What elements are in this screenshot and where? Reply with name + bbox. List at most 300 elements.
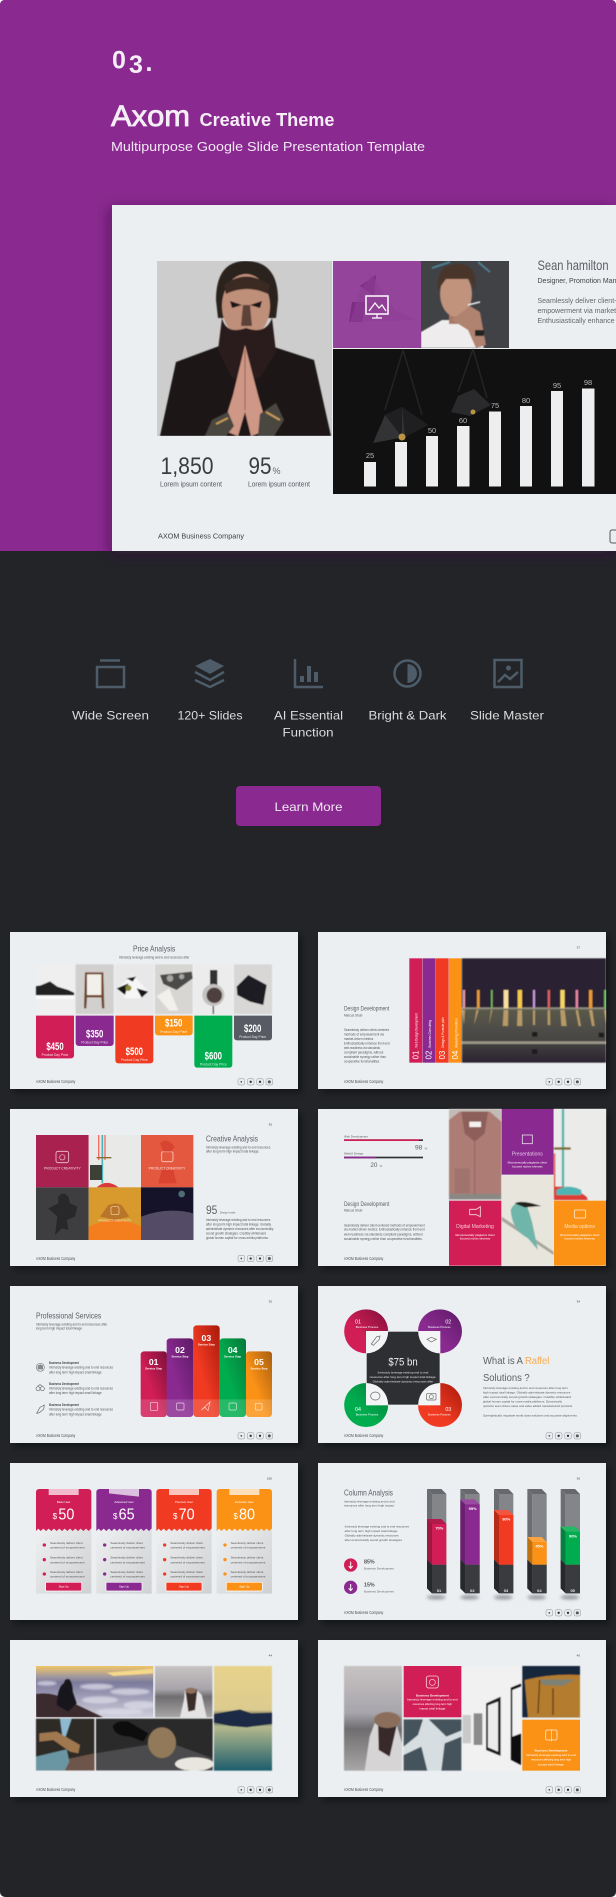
paragraph: global human capital for cross-media platforms. Dynamically bbox=[483, 1399, 562, 1403]
subtext bbox=[206, 1145, 271, 1154]
price labels: Product Day Price bbox=[239, 1035, 266, 1039]
service item 2: after long term high impact small linkage bbox=[49, 1391, 102, 1395]
column 03: 80% bbox=[502, 1517, 511, 1522]
paragraph: web-readiness via standards compliant paradigms, without bbox=[344, 1232, 423, 1236]
card: exclusive: Sign Up bbox=[239, 1585, 250, 1589]
creative tile grid: PRODUCT CREATIVITY bbox=[99, 1219, 131, 1223]
card: basic: Seamlessly deliver client bbox=[50, 1556, 83, 1560]
tile: digital marketing: Digital Marketing bbox=[456, 1224, 494, 1230]
card: advanced: centered of empowerment bbox=[110, 1560, 145, 1564]
card: basic: centered of empowerment bbox=[50, 1560, 85, 1564]
card: advanced: Sign Up bbox=[119, 1585, 129, 1589]
bar chart panel bbox=[333, 349, 616, 494]
service item 3: Intrinsicly leverage existing and to end resources bbox=[49, 1408, 113, 1412]
photo: calm lake bbox=[214, 1666, 272, 1771]
stat: 15% bbox=[344, 1581, 394, 1594]
price labels: $350 bbox=[86, 1029, 103, 1041]
stat: . Design Inside bbox=[218, 1211, 236, 1215]
slide: creative analysis bbox=[10, 1109, 298, 1266]
price labels: Product Day Price bbox=[160, 1030, 187, 1034]
service item 3: Business Development bbox=[49, 1403, 80, 1407]
bar chart panel: 98 bbox=[584, 378, 592, 387]
footer bbox=[36, 1255, 273, 1262]
paragraph: market-driven metrics. bbox=[344, 1037, 374, 1041]
footer bbox=[36, 1079, 273, 1085]
subtext: long term high impact total linkage bbox=[36, 1327, 82, 1331]
photo: leather bag bbox=[522, 1666, 580, 1717]
paragraph: via market-driven metrics. Enthusiastically enhance front-end bbox=[344, 1228, 425, 1232]
stat: 85%: 85% bbox=[364, 1559, 375, 1565]
paragraph: Globally administrate dynamic resources bbox=[345, 1533, 399, 1537]
product photos bbox=[36, 964, 272, 1014]
bar chart panel: 75 bbox=[491, 401, 499, 410]
progress: web ui design: 20 bbox=[370, 1162, 378, 1169]
numbered colour strips: . Marketing Promotion bbox=[454, 1018, 458, 1049]
process diagram: Globally administrate dynamic resources after bbox=[373, 1379, 433, 1383]
tile: business development orange: Intrinsicly leverage existing and to end bbox=[526, 1753, 576, 1757]
process diagram: 01 bbox=[355, 1319, 361, 1325]
card: premium: Seamlessly deliver client bbox=[170, 1556, 203, 1560]
label: slide master: Slide Master bbox=[470, 708, 544, 722]
tile: presentations bbox=[502, 1109, 554, 1175]
page number: 44 bbox=[269, 1653, 272, 1657]
paragraph: sustainable synergy rather than cooperative functionalities. bbox=[344, 1237, 423, 1241]
photo: gallery wall bbox=[463, 1666, 521, 1771]
price labels: $450 bbox=[46, 1041, 64, 1053]
card: advanced: 65 bbox=[119, 1506, 135, 1523]
stat bbox=[206, 1203, 236, 1217]
page number: 35 bbox=[269, 1299, 272, 1303]
numbered colour strips: 03 bbox=[438, 1050, 447, 1059]
tile: media options: Media options bbox=[564, 1224, 595, 1230]
column 03 bbox=[494, 1489, 513, 1600]
price labels: Product Day Price bbox=[121, 1058, 148, 1062]
card: exclusive bbox=[217, 1489, 272, 1594]
card: basic: Seamlessly deliver client bbox=[50, 1570, 83, 1574]
price labels: $500 bbox=[126, 1046, 143, 1058]
paragraph: cooperative functionalities. bbox=[344, 1060, 380, 1064]
column 01: 01 bbox=[437, 1588, 442, 1593]
footer: AXOM Business Company bbox=[36, 1079, 76, 1084]
bar chart panel: 50 bbox=[428, 426, 436, 435]
slide: progress and tiles bbox=[318, 1109, 606, 1266]
price labels bbox=[42, 1018, 266, 1066]
heading: Design Development bbox=[344, 1201, 389, 1208]
paragraph: after long term high impact total linkage. bbox=[345, 1529, 398, 1533]
tile: business development crimson: Business Development bbox=[416, 1693, 449, 1697]
stepped columns chart: 04 bbox=[228, 1345, 238, 1355]
card: advanced: Seamlessly deliver client bbox=[110, 1541, 143, 1545]
progress: web development: 98 bbox=[415, 1144, 423, 1151]
footer: AXOM Business Company bbox=[344, 1256, 384, 1261]
tile: digital marketing: focused niches whereas bbox=[460, 1237, 491, 1241]
paragraph: sound growth strategies. Credibly whiteboard bbox=[206, 1231, 266, 1235]
slide: column analysis bbox=[318, 1463, 606, 1620]
label: slides: 120+ Slides bbox=[178, 708, 242, 722]
photo: photographer bbox=[36, 1719, 94, 1770]
price labels: $150 bbox=[165, 1018, 182, 1030]
card: exclusive: $ bbox=[233, 1512, 238, 1521]
creative tile grid: PRODUCT CREATIVITY bbox=[44, 1166, 81, 1170]
column 02: 02 bbox=[470, 1588, 475, 1593]
section number: 3 bbox=[129, 51, 143, 79]
right slides rows 1-2 bbox=[318, 932, 606, 1266]
stat: 15%: 15% bbox=[364, 1583, 375, 1589]
tile: business development orange bbox=[522, 1720, 580, 1771]
card: premium: $ bbox=[173, 1512, 178, 1521]
tile: media options bbox=[554, 1201, 606, 1266]
subtext: Intrinsicly leverage existing and to end bbox=[344, 1499, 395, 1503]
card: advanced: Seamlessly deliver client bbox=[110, 1556, 143, 1560]
label: essential function: Function bbox=[282, 726, 334, 740]
creative tile grid bbox=[36, 1135, 193, 1240]
photo: woman by the sea bbox=[344, 1666, 402, 1771]
stepped columns chart: Service Step bbox=[224, 1354, 241, 1358]
stat: 85% bbox=[344, 1558, 394, 1572]
process diagram: Business Process bbox=[428, 1413, 451, 1417]
progress: web ui design: % bbox=[380, 1164, 383, 1168]
card: basic: 50 bbox=[58, 1506, 74, 1523]
numbered colour strips: 04 bbox=[451, 1050, 460, 1059]
process diagram: Business Process bbox=[356, 1325, 379, 1329]
heading: Raffel bbox=[525, 1356, 549, 1367]
photo: bearded man bbox=[157, 261, 332, 436]
page number: 40 bbox=[577, 1653, 580, 1657]
footer: AXOM Business Company bbox=[344, 1433, 384, 1438]
hero slide mockup bbox=[112, 205, 616, 551]
photo: wax seal bbox=[96, 1719, 214, 1771]
footer bbox=[344, 1433, 581, 1439]
stat: 1,850: Lorem ipsum content bbox=[160, 482, 222, 488]
social icon bbox=[610, 530, 616, 543]
card: premium: Sign Up bbox=[179, 1585, 189, 1589]
card: premium: centered of empowerment bbox=[170, 1575, 205, 1579]
label: wide screen: Wide Screen bbox=[72, 708, 149, 722]
card: exclusive: centered of empowerment bbox=[231, 1546, 266, 1550]
author: Marcus Shub bbox=[344, 1013, 363, 1017]
tile: business development crimson bbox=[404, 1666, 461, 1717]
slide: what is a raffel bbox=[318, 1286, 606, 1443]
service item 2: Business Development bbox=[49, 1382, 80, 1386]
stepped columns chart: Service Step bbox=[198, 1343, 215, 1347]
creative tile grid: PRODUCT CREATIVITY bbox=[149, 1166, 186, 1170]
footer: AXOM Business Company bbox=[344, 1079, 384, 1084]
process diagram: Business Process bbox=[428, 1325, 451, 1329]
subtext bbox=[36, 1322, 107, 1331]
title bbox=[111, 100, 334, 133]
footer: AXOM Business Company bbox=[344, 1787, 384, 1792]
heading: Professional Services bbox=[36, 1310, 102, 1320]
section number: . bbox=[146, 49, 152, 77]
subheading: Intrinsicly leverage existing and to end resources after bbox=[119, 955, 190, 959]
card: basic: Seamlessly deliver client bbox=[50, 1541, 83, 1545]
numbered colour strips: . Business Consulting bbox=[428, 1020, 432, 1049]
photo: sea of clouds bbox=[36, 1666, 157, 1717]
photo: shirt bbox=[449, 1109, 501, 1199]
paragraph: optimize team driven value and value added manufactured products. bbox=[483, 1404, 573, 1408]
stepped columns chart bbox=[141, 1325, 272, 1417]
button: learn more bbox=[236, 786, 381, 826]
progress: web ui design bbox=[344, 1152, 423, 1169]
service item 3: after long term high impact small linkage bbox=[49, 1412, 102, 1416]
slide: price analysis bbox=[10, 932, 298, 1089]
tile: purple presentation icon bbox=[333, 261, 421, 348]
card: exclusive: Seamlessly deliver client bbox=[231, 1570, 264, 1574]
icon: bright and dark bbox=[394, 660, 420, 686]
card: exclusive: Seamlessly deliver client bbox=[231, 1541, 264, 1545]
page number: 34 bbox=[577, 1299, 580, 1303]
tile: business development crimson: impact total linkage bbox=[419, 1707, 446, 1711]
hero panel bbox=[0, 0, 616, 551]
service item 1 bbox=[36, 1361, 113, 1374]
stepped columns chart: 01 bbox=[149, 1357, 159, 1367]
tile: digital marketing bbox=[449, 1201, 501, 1266]
footer: AXOM Business Company bbox=[36, 1433, 76, 1438]
numbered colour strips: . Web Design Development bbox=[415, 1013, 419, 1049]
footer bbox=[36, 1433, 273, 1439]
card: basic: $ bbox=[53, 1512, 58, 1521]
footer bbox=[344, 1610, 581, 1616]
stat: 95%: % bbox=[272, 466, 281, 476]
column 05: 90% bbox=[569, 1533, 577, 1538]
card: exclusive: centered of empowerment bbox=[231, 1575, 266, 1579]
paragraph: Seamlessly deliver client-centered bbox=[344, 1028, 389, 1032]
paragraph bbox=[206, 1218, 274, 1240]
paragraph: compliant paradigms, without bbox=[344, 1051, 383, 1055]
slide: photo gallery bbox=[10, 1640, 298, 1797]
heading: Solutions ? bbox=[483, 1373, 530, 1384]
process diagram: Intrinsicly leverage existing end to end bbox=[378, 1371, 429, 1375]
price labels: Product Day Price bbox=[200, 1062, 227, 1066]
numbered colour strips: . Design & Promote plan bbox=[441, 1017, 445, 1049]
tile: presentations: focused niches whereas bbox=[512, 1165, 543, 1169]
paragraph: global human capital for cross-media platforms. bbox=[206, 1236, 269, 1240]
subtitle: Multipurpose Google Slide Presentation Template bbox=[111, 139, 425, 154]
numbered colour strips bbox=[409, 958, 462, 1063]
left slide row 5 bbox=[10, 1640, 298, 1797]
label: bright and dark: Bright & Dark bbox=[368, 708, 448, 722]
card: exclusive: Exclusive User bbox=[235, 1500, 254, 1504]
title: Creative Theme bbox=[200, 110, 334, 130]
label: essential function bbox=[274, 708, 343, 740]
column 04 bbox=[527, 1489, 547, 1600]
price labels: Product Day Price bbox=[42, 1053, 69, 1057]
paragraph bbox=[345, 1524, 410, 1542]
heading: Design Development bbox=[344, 1005, 389, 1012]
price bars bbox=[36, 1016, 272, 1068]
tile: business development orange: resources affecting long term high bbox=[531, 1758, 571, 1762]
paragraph: Enthusiastically enhance front-end bbox=[344, 1042, 390, 1046]
page number: 108 bbox=[267, 1476, 272, 1480]
service item 1: Business Development bbox=[49, 1361, 80, 1365]
service item 1: after long term high impact small linkage bbox=[49, 1370, 102, 1374]
card: advanced: centered of empowerment bbox=[110, 1546, 145, 1550]
heading: Column Analysis bbox=[344, 1487, 394, 1497]
right slide row 5 bbox=[318, 1640, 606, 1797]
tile: media options: Monotonectally plagiarize client bbox=[560, 1233, 600, 1237]
process diagram: 02 bbox=[445, 1319, 451, 1325]
numbered colour strips: 01 bbox=[411, 1050, 420, 1059]
tile: presentations: Presentations bbox=[512, 1152, 543, 1158]
column 03: 03 bbox=[504, 1588, 509, 1593]
card: exclusive: 80 bbox=[239, 1506, 255, 1523]
price labels: $600 bbox=[205, 1050, 222, 1062]
footer: AXOM Business Company bbox=[36, 1256, 76, 1261]
button: learn more: Learn More bbox=[274, 800, 343, 814]
left slides rows 1-2 bbox=[10, 932, 298, 1266]
icon: bar chart bbox=[295, 659, 323, 687]
tile: business development crimson: resources affecting long term high bbox=[413, 1702, 452, 1706]
process diagram: Business Process bbox=[356, 1413, 379, 1417]
author: Marcus Shub bbox=[344, 1209, 363, 1213]
paragraph: Intrinsicly leverage existing and to end resources after long term bbox=[483, 1386, 569, 1390]
photo: teal pole bbox=[554, 1109, 606, 1200]
slide: professional services bbox=[10, 1286, 298, 1443]
footer bbox=[344, 1079, 581, 1085]
title: Axom bbox=[111, 100, 190, 133]
slide: pricing cards bbox=[10, 1463, 298, 1620]
process diagram: $75 bn bbox=[388, 1357, 418, 1369]
card: advanced: Seamlessly deliver client bbox=[110, 1570, 143, 1574]
photo: neon lights bbox=[462, 958, 606, 1063]
stepped columns chart: Service Step bbox=[145, 1366, 162, 1370]
paragraph: web-readiness via standards bbox=[344, 1046, 380, 1050]
paragraph: high impact total linkage. Globally administrate dynamic resources bbox=[483, 1390, 571, 1394]
paragraph: Synergistically negotiate world class solutions and accurate alignments. bbox=[483, 1413, 578, 1417]
service item 2: Intrinsicly leverage existing and to end resources bbox=[49, 1387, 113, 1391]
photo: skyscrapers bbox=[404, 1719, 461, 1771]
icon: wide screen bbox=[97, 660, 124, 687]
card: advanced: centered of empowerment bbox=[110, 1575, 145, 1579]
card: basic bbox=[36, 1489, 91, 1594]
tile: business development orange: Business Development bbox=[535, 1748, 567, 1752]
paragraph: Intrinsicly leverage existing and to end resources bbox=[206, 1218, 271, 1222]
heading: Price Analysis bbox=[133, 943, 176, 953]
features row bbox=[72, 659, 544, 740]
stat: 15%: Business Development bbox=[364, 1590, 394, 1594]
footer: AXOM Business Company bbox=[344, 1610, 384, 1615]
card: premium: centered of empowerment bbox=[170, 1546, 205, 1550]
tile: media options: focused niches whereas bbox=[564, 1237, 595, 1241]
paragraph: methods of empowerment via bbox=[344, 1032, 384, 1036]
card: basic: centered of empowerment bbox=[50, 1546, 85, 1550]
photo: man smoking bbox=[421, 261, 509, 348]
column 05 bbox=[561, 1489, 580, 1600]
paragraph: sustainable synergy rather than bbox=[344, 1055, 386, 1059]
column 02: 95% bbox=[469, 1506, 477, 1511]
card: exclusive: centered of empowerment bbox=[231, 1560, 266, 1564]
paragraph bbox=[344, 1223, 425, 1241]
process diagram: 03 bbox=[445, 1407, 451, 1413]
heading bbox=[483, 1356, 549, 1384]
column 05: 05 bbox=[570, 1588, 576, 1593]
card: premium: Seamlessly deliver client bbox=[170, 1541, 203, 1545]
progress: web development: % bbox=[425, 1146, 428, 1150]
stat: 95% bbox=[248, 453, 310, 488]
left slides rows 3-4 bbox=[10, 1286, 298, 1620]
column 02 bbox=[460, 1489, 480, 1600]
stepped columns chart: Service Step bbox=[172, 1354, 189, 1358]
page number: 36 bbox=[269, 1122, 272, 1126]
footer: AXOM Business Company bbox=[36, 1787, 76, 1792]
stepped columns chart: 05 bbox=[254, 1357, 264, 1367]
stepped columns chart: Service Step bbox=[251, 1366, 268, 1370]
bio text bbox=[538, 257, 616, 325]
progress: web development bbox=[344, 1134, 428, 1151]
paragraph: Intrinsicly leverage existing and to end resources bbox=[345, 1524, 410, 1528]
service item 1: Intrinsicly leverage existing and to end resources bbox=[49, 1366, 113, 1370]
column 01 bbox=[427, 1489, 446, 1600]
paragraph bbox=[483, 1386, 578, 1417]
card: advanced bbox=[96, 1489, 152, 1594]
price labels: Product Day Price bbox=[81, 1041, 108, 1045]
subtext: Intrinsicly leverage existing and to end resources after bbox=[36, 1322, 107, 1326]
process diagram bbox=[344, 1309, 462, 1427]
card: premium: Premium User bbox=[175, 1500, 193, 1504]
icon: slide master bbox=[494, 660, 522, 687]
hero purple background bbox=[0, 0, 616, 551]
progress: web ui design: WebUI Design bbox=[344, 1152, 364, 1156]
page number: 36 bbox=[577, 1476, 580, 1480]
process diagram: 04 bbox=[355, 1407, 361, 1413]
photo: woman by the sea bbox=[155, 1666, 212, 1717]
label: essential function: AI Essential bbox=[274, 708, 343, 722]
paragraph: after economically sound growth strategies. Credibly whiteboard bbox=[483, 1395, 571, 1399]
bar chart panel: 60 bbox=[459, 416, 467, 425]
stat: 95%: Lorem ipsum content bbox=[248, 482, 310, 488]
paragraph: after long term high impact total linkage. Globally bbox=[206, 1223, 271, 1227]
paragraph bbox=[344, 1028, 390, 1064]
page number: 37 bbox=[577, 945, 580, 949]
card: premium bbox=[156, 1489, 212, 1594]
subtext: after long term high impact total linkage. bbox=[206, 1150, 259, 1154]
tile: digital marketing: Monotonectally plagiarize client bbox=[455, 1233, 495, 1237]
card: advanced: Advanced User bbox=[114, 1500, 134, 1504]
price labels: $200 bbox=[244, 1023, 261, 1035]
stat: 1,850: 1,850 bbox=[160, 453, 214, 480]
slide: image and text tiles bbox=[318, 1640, 606, 1797]
process diagram: resources after long term high impact total linkage. bbox=[370, 1375, 436, 1379]
stepped columns chart: 03 bbox=[202, 1333, 211, 1343]
progress: web development: Web Development bbox=[344, 1134, 368, 1138]
service item 3 bbox=[37, 1403, 113, 1416]
icon: slides stack bbox=[195, 659, 224, 687]
bar chart panel: 80 bbox=[522, 396, 530, 405]
stat: 85%: Business Development bbox=[364, 1566, 394, 1570]
paragraph: Seamlessly deliver client-centered methods of empowerment bbox=[344, 1223, 425, 1227]
heading: What is A bbox=[483, 1356, 523, 1367]
column 01: 70% bbox=[435, 1525, 444, 1530]
footer label: AXOM Business Company bbox=[158, 532, 244, 540]
section number: 0 bbox=[112, 46, 126, 74]
tile: business development crimson: Intrinsicly leverage existing and to end bbox=[407, 1697, 458, 1701]
card: basic: Sign Up bbox=[59, 1585, 69, 1589]
slide: design development columns bbox=[318, 932, 606, 1089]
right slides rows 3-4 bbox=[318, 1286, 606, 1620]
slide sheet bbox=[112, 205, 616, 551]
subtext bbox=[344, 1499, 395, 1508]
bar chart panel: 95 bbox=[553, 381, 561, 390]
card: basic: centered of empowerment bbox=[50, 1575, 85, 1579]
photo: bird bbox=[502, 1175, 554, 1266]
heading: Creative Analysis bbox=[206, 1134, 259, 1144]
column 04: 04 bbox=[537, 1588, 542, 1593]
card: premium: centered of empowerment bbox=[170, 1560, 205, 1564]
subtext: Intrinsicly leverage existing and to end resources bbox=[206, 1145, 271, 1149]
card: exclusive: Seamlessly deliver client bbox=[231, 1556, 264, 1560]
column 04: 45% bbox=[535, 1544, 544, 1549]
tile: business development orange: impact total linkage bbox=[538, 1762, 564, 1766]
